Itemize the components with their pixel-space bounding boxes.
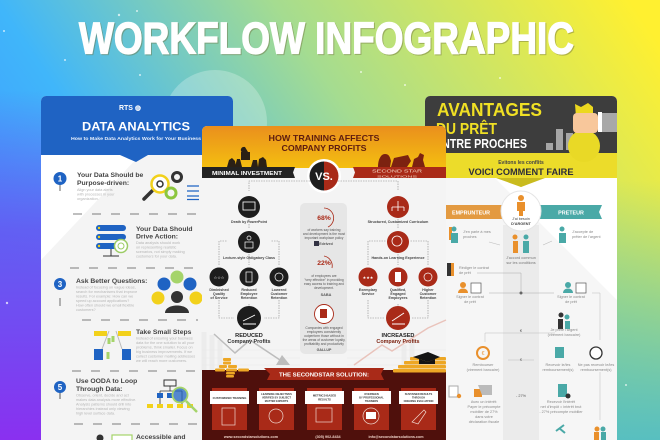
flow: reimbursement: Rembourser: [473, 363, 494, 367]
step 4: collect customer mailing addresses: [136, 354, 195, 358]
node: exemplary service: ★★★: [363, 275, 374, 280]
connectors: [219, 181, 428, 318]
solution: customized training: CUSTOMIZED TRAINING: [213, 396, 247, 400]
node: reduced profits: REDUCED: [235, 333, 263, 339]
step 2: Your Data Should: [136, 226, 193, 233]
node: customer retention: Higher: [422, 288, 434, 292]
node: reduced profits: [227, 306, 271, 345]
stats card: development.: [314, 286, 334, 290]
step 5: 5: [58, 383, 63, 392]
node: lecture-style class: [223, 231, 275, 260]
flow: interest: Payer le précompte: [468, 405, 500, 409]
stats card: SABA: [321, 293, 332, 297]
solution: learning objectives: LEARNING OBJECTIVES: [261, 392, 292, 396]
stats card: important workplace policy: [305, 236, 344, 240]
flow: agreements: J'accord commun: [506, 256, 536, 260]
step 4: [94, 329, 195, 363]
flow: reimbursement: (virement bancaire): [467, 368, 500, 372]
node: death by powerpoint: Death by PowerPoint: [231, 220, 268, 224]
flow: contract: de prêt: [459, 271, 472, 275]
solution: overseen by professional: BY PROFESSIONAL: [359, 396, 384, 400]
panel subheading: How to Make Data Analytics Work for Your Business: [71, 136, 201, 142]
flow: loan transfer: [485, 312, 581, 342]
step 6: [96, 434, 186, 440]
solution: customized training: [210, 388, 249, 430]
flow: contract: [447, 263, 600, 340]
solution: sustained results: THROUGH: [412, 396, 425, 400]
node: reduced retention: [240, 268, 258, 300]
heading line 3: ENTRE PROCHES: [435, 137, 527, 151]
flow: agreements: prêter de l'argent: [572, 235, 602, 239]
step 3: Instead of focusing on vague ideas,: [76, 286, 136, 290]
coin pile right with graduation cap: [393, 352, 446, 372]
step 5: [54, 378, 197, 416]
central circle: j'ai besoin d'argent: D'ARGENT: [511, 222, 532, 226]
step 4: we will reach more customers.: [136, 359, 187, 363]
solution banner: THE SECONDSTAR SOLUTION:: [279, 372, 369, 378]
stats card: the areas of customer loyalty,: [303, 338, 345, 342]
stats card: 22%: [317, 260, 331, 267]
flow: reimbursement: remboursement(s): [542, 368, 574, 372]
solution footer: [202, 368, 446, 440]
solution: overseen by professional: OVERSEEN: [364, 392, 379, 396]
step 4: Instead of ensuring your business: [136, 336, 193, 340]
step 5: Observe, orient, decide and act: [76, 394, 130, 398]
solution: overseen by professional: TRAINERS: [365, 399, 378, 403]
icon: money bag and fist: [546, 103, 617, 162]
stats card: employees consistently: [307, 330, 341, 334]
heading: AVANTAGES: [437, 99, 542, 120]
step 2: [96, 225, 193, 258]
section heading: VOICI COMMENT FAIRE: [468, 167, 574, 177]
stats card: 68%: [317, 215, 331, 222]
stats card: of workers say training: [308, 228, 341, 232]
node: engaged employees: Engaged: [390, 292, 406, 296]
stats card: outperform those without in: [304, 334, 344, 338]
step 2: customers for your data.: [136, 254, 177, 258]
solution: learning objectives: MATTER EXPERTS: [265, 399, 288, 403]
label: emprunteur: [446, 205, 505, 219]
node: lowered retention: Retention: [271, 296, 287, 300]
node: reduced profits: Company Profits: [227, 339, 271, 345]
step 3: speed up account applications?: [76, 299, 129, 303]
solution: sustained results: [399, 388, 438, 430]
subheading: Evitons les conflits: [498, 160, 544, 166]
flow: reimbursement: €: [482, 351, 485, 357]
icon: magnifier and gears: [144, 172, 199, 200]
node: increased profits: [376, 306, 420, 345]
silhouettes: classroom left: [227, 147, 267, 167]
solution: learning objectives: [257, 388, 296, 430]
flow: contract: Signer le contrat: [456, 295, 485, 299]
label: emprunteur: EMPRUNTEUR: [452, 210, 490, 216]
node: lowered retention: Lowered: [272, 288, 286, 292]
contact phone: (305) 902-8434: [315, 435, 342, 439]
node: increased profits: Company Profits: [376, 339, 420, 345]
node: hands-on: [372, 231, 424, 260]
central circle: j'ai besoin d'argent: [501, 191, 541, 231]
stats card: easy access to training and: [304, 282, 344, 286]
solution: learning objectives: VERIFIED BY SUBJECT: [262, 396, 291, 400]
stats card: profitability and productivity: [304, 342, 344, 346]
node: exemplary service: Exemplary: [359, 288, 377, 292]
step 3: [54, 270, 202, 313]
step 5: high level surface data.: [76, 412, 115, 416]
step 3: search for mechanisms that improve: [76, 290, 137, 294]
heading line 2: DU PRÊT: [436, 119, 497, 138]
ribbon: minimal investment: [202, 167, 295, 178]
node: reduced retention: Retention: [241, 296, 257, 300]
flow: loan transfer: €: [520, 328, 523, 333]
flow: agreements: [449, 226, 602, 265]
stats card: "very effective" in providing: [304, 278, 344, 282]
flow: reimbursement: [467, 347, 614, 372]
icon: hierarchy magnifier: [147, 380, 197, 412]
node: increased profits: INCREASED: [382, 333, 414, 339]
flow: interest: - 27%: [516, 394, 527, 398]
step 3: How often should we email flexible: [76, 304, 134, 308]
step 4: Take Small Steps: [136, 329, 192, 336]
flow: interest: mobilier de 27%: [470, 410, 498, 414]
panel: avantages du pret: [425, 96, 617, 440]
node: engaged employees: Employees: [389, 296, 407, 300]
stats card: of employees are: [311, 274, 337, 278]
step 5: hierarchies instead only viewing: [76, 407, 130, 411]
solution: metrics-based results: [305, 388, 344, 430]
step 4: data for the one solution to all your: [136, 341, 195, 345]
node: diminished quality: of Service: [210, 296, 228, 300]
node: diminished quality: Quality: [213, 292, 225, 296]
node: lowered retention: [270, 268, 288, 300]
node: death by powerpoint: [231, 196, 268, 224]
flow: interest: [449, 372, 606, 440]
node: customer retention: Retention: [420, 296, 436, 300]
node: customer retention: [418, 268, 438, 300]
solution: metrics-based results: RESULTS: [318, 398, 331, 402]
panel heading: DATA ANALYTICS: [82, 120, 190, 134]
node: lecture-style class: Lecture-style Obligatory Class: [223, 256, 275, 260]
step 3: Ask Better Questions:: [76, 278, 147, 285]
vs circle: VS.: [315, 171, 333, 183]
stats card: GALLUP: [317, 348, 332, 352]
step 1: Your Data Should be: [77, 172, 144, 179]
solution banner: [264, 368, 384, 380]
solution: metrics-based results: METRICS-BASED: [313, 394, 336, 398]
step 1: organization.: [77, 197, 99, 201]
node: lowered retention: Customer: [271, 292, 288, 296]
flow: reimbursement: Ne pas recevoir le/les: [578, 363, 614, 367]
flow: interest: - 27% précompte mobilier: [539, 410, 583, 414]
flow: interest: dans votre: [475, 415, 493, 419]
step 2: scenarios, not simply making: [136, 250, 185, 254]
coin pile left: [215, 358, 249, 378]
node: diminished quality: ☆☆☆: [214, 275, 225, 280]
flow: loan transfer: Je prête l'argent: [550, 328, 578, 332]
node: engaged employees: Qualified,: [390, 288, 406, 292]
icon: question bubbles: [152, 270, 202, 313]
flow: interest: net d'impôt = intérêt brut: [541, 405, 582, 409]
step 2: Data analysis should work: [136, 241, 180, 245]
step 1: Purpose-driven:: [77, 180, 129, 187]
divider dashes: [70, 214, 198, 424]
silhouettes: workshop right: [378, 153, 425, 167]
node: engaged employees: [388, 268, 408, 300]
step 4: problems, think smaller. Focus on: [136, 346, 193, 350]
heading: COMPANY PROFITS: [282, 143, 367, 153]
step 5: makes data analysis more effective.: [76, 398, 136, 402]
contact website: www.secondstarsolutions.com: [223, 435, 279, 439]
flow: agreements: sur les conditions: [506, 261, 536, 265]
solution: overseen by professional: [352, 388, 391, 430]
step 4: big business improvements. If we: [136, 350, 192, 354]
panel logo: RTS ◍: [119, 105, 141, 112]
ribbon: second star: SECOND STAR: [372, 168, 423, 174]
node: diminished quality: Diminished: [209, 288, 229, 292]
stats card: Companies with engaged: [305, 326, 343, 330]
flow: agreements: proches: [463, 235, 477, 239]
step 2: Drive Action:: [136, 234, 178, 240]
central circle: j'ai besoin d'argent: J'ai besoin: [512, 217, 530, 221]
flow: contract: de prêt: [464, 300, 477, 304]
node: exemplary service: Service: [362, 292, 374, 296]
step 1: Align your data alerts: [77, 188, 113, 192]
flow: loan transfer: (virement bancaire): [548, 333, 581, 337]
flow: reimbursement: Recevoir le/les: [546, 363, 571, 367]
flow: interest: Recevoir l'intérêt: [547, 400, 576, 404]
solution: sustained results: ONGOING EVALUATION: [404, 399, 433, 403]
ribbon: second star: SOLUTIONS: [377, 174, 417, 178]
step 3: customers?: [76, 308, 96, 312]
panel: data analytics: [41, 96, 233, 440]
title: WORKFLOW INFOGRAPHIC: [79, 14, 574, 64]
step 3: results. For example: How can we: [76, 294, 133, 298]
contact email: info@secondstarsolutions.com: [368, 435, 424, 439]
node: curriculum: [368, 196, 428, 224]
flow: agreements: J'accepte de: [572, 230, 593, 234]
node: curriculum: Structured, Customized Curriculum: [368, 220, 428, 224]
node: diminished quality: [209, 268, 229, 300]
flow: contract: Signer le contrat: [557, 295, 586, 299]
step 5: Use OODA to Loop: [76, 378, 137, 385]
step 1: 1: [58, 174, 63, 184]
ribbon: second star: [353, 167, 446, 178]
step 1: with processes in your: [77, 192, 115, 196]
step 5: Analysis patterns should drill into: [76, 402, 131, 406]
vs circle: [307, 159, 341, 193]
stats card: Edelved: [319, 242, 333, 246]
flow: agreements: J'en parle à mes: [463, 230, 491, 234]
label: preteur: PRETEUR: [558, 210, 584, 216]
stats card: [300, 203, 347, 354]
flow: contract: Rédiger le contrat: [459, 266, 490, 270]
flow: reimbursement: remboursement(s): [580, 368, 612, 372]
ribbon: minimal investment: MINIMAL INVESTMENT: [212, 171, 282, 177]
trend arrows: [202, 320, 446, 370]
step 5: Through Data:: [76, 386, 122, 393]
node: exemplary service: [358, 268, 378, 296]
step 3: 3: [58, 280, 63, 289]
icon: servers: [96, 225, 128, 256]
flow: reimbursement: €: [520, 357, 523, 362]
panel: how training affects company profits: [202, 126, 446, 440]
header band: [202, 126, 446, 168]
label: preteur: [538, 205, 602, 219]
node: reduced retention: Employee: [241, 292, 257, 296]
heading: HOW TRAINING AFFECTS: [268, 133, 380, 143]
flow: contract: de prêt: [565, 300, 578, 304]
node: reduced retention: Reduced: [241, 288, 257, 292]
stats card: and development is the most: [303, 232, 345, 236]
step 2: on representing realistic: [136, 246, 176, 250]
heading: [268, 133, 380, 153]
flow: interest: Avec un intérêt:: [471, 400, 497, 404]
node: hands-on: Hands-on Learning Experience: [372, 256, 424, 260]
solution: sustained results: SUSTAINED RESULTS: [405, 392, 432, 396]
step 1: [54, 172, 199, 201]
node: customer retention: Customer: [420, 292, 437, 296]
icon: small steps road: [94, 331, 131, 360]
flow: interest: déclaration fiscale: [469, 420, 499, 424]
